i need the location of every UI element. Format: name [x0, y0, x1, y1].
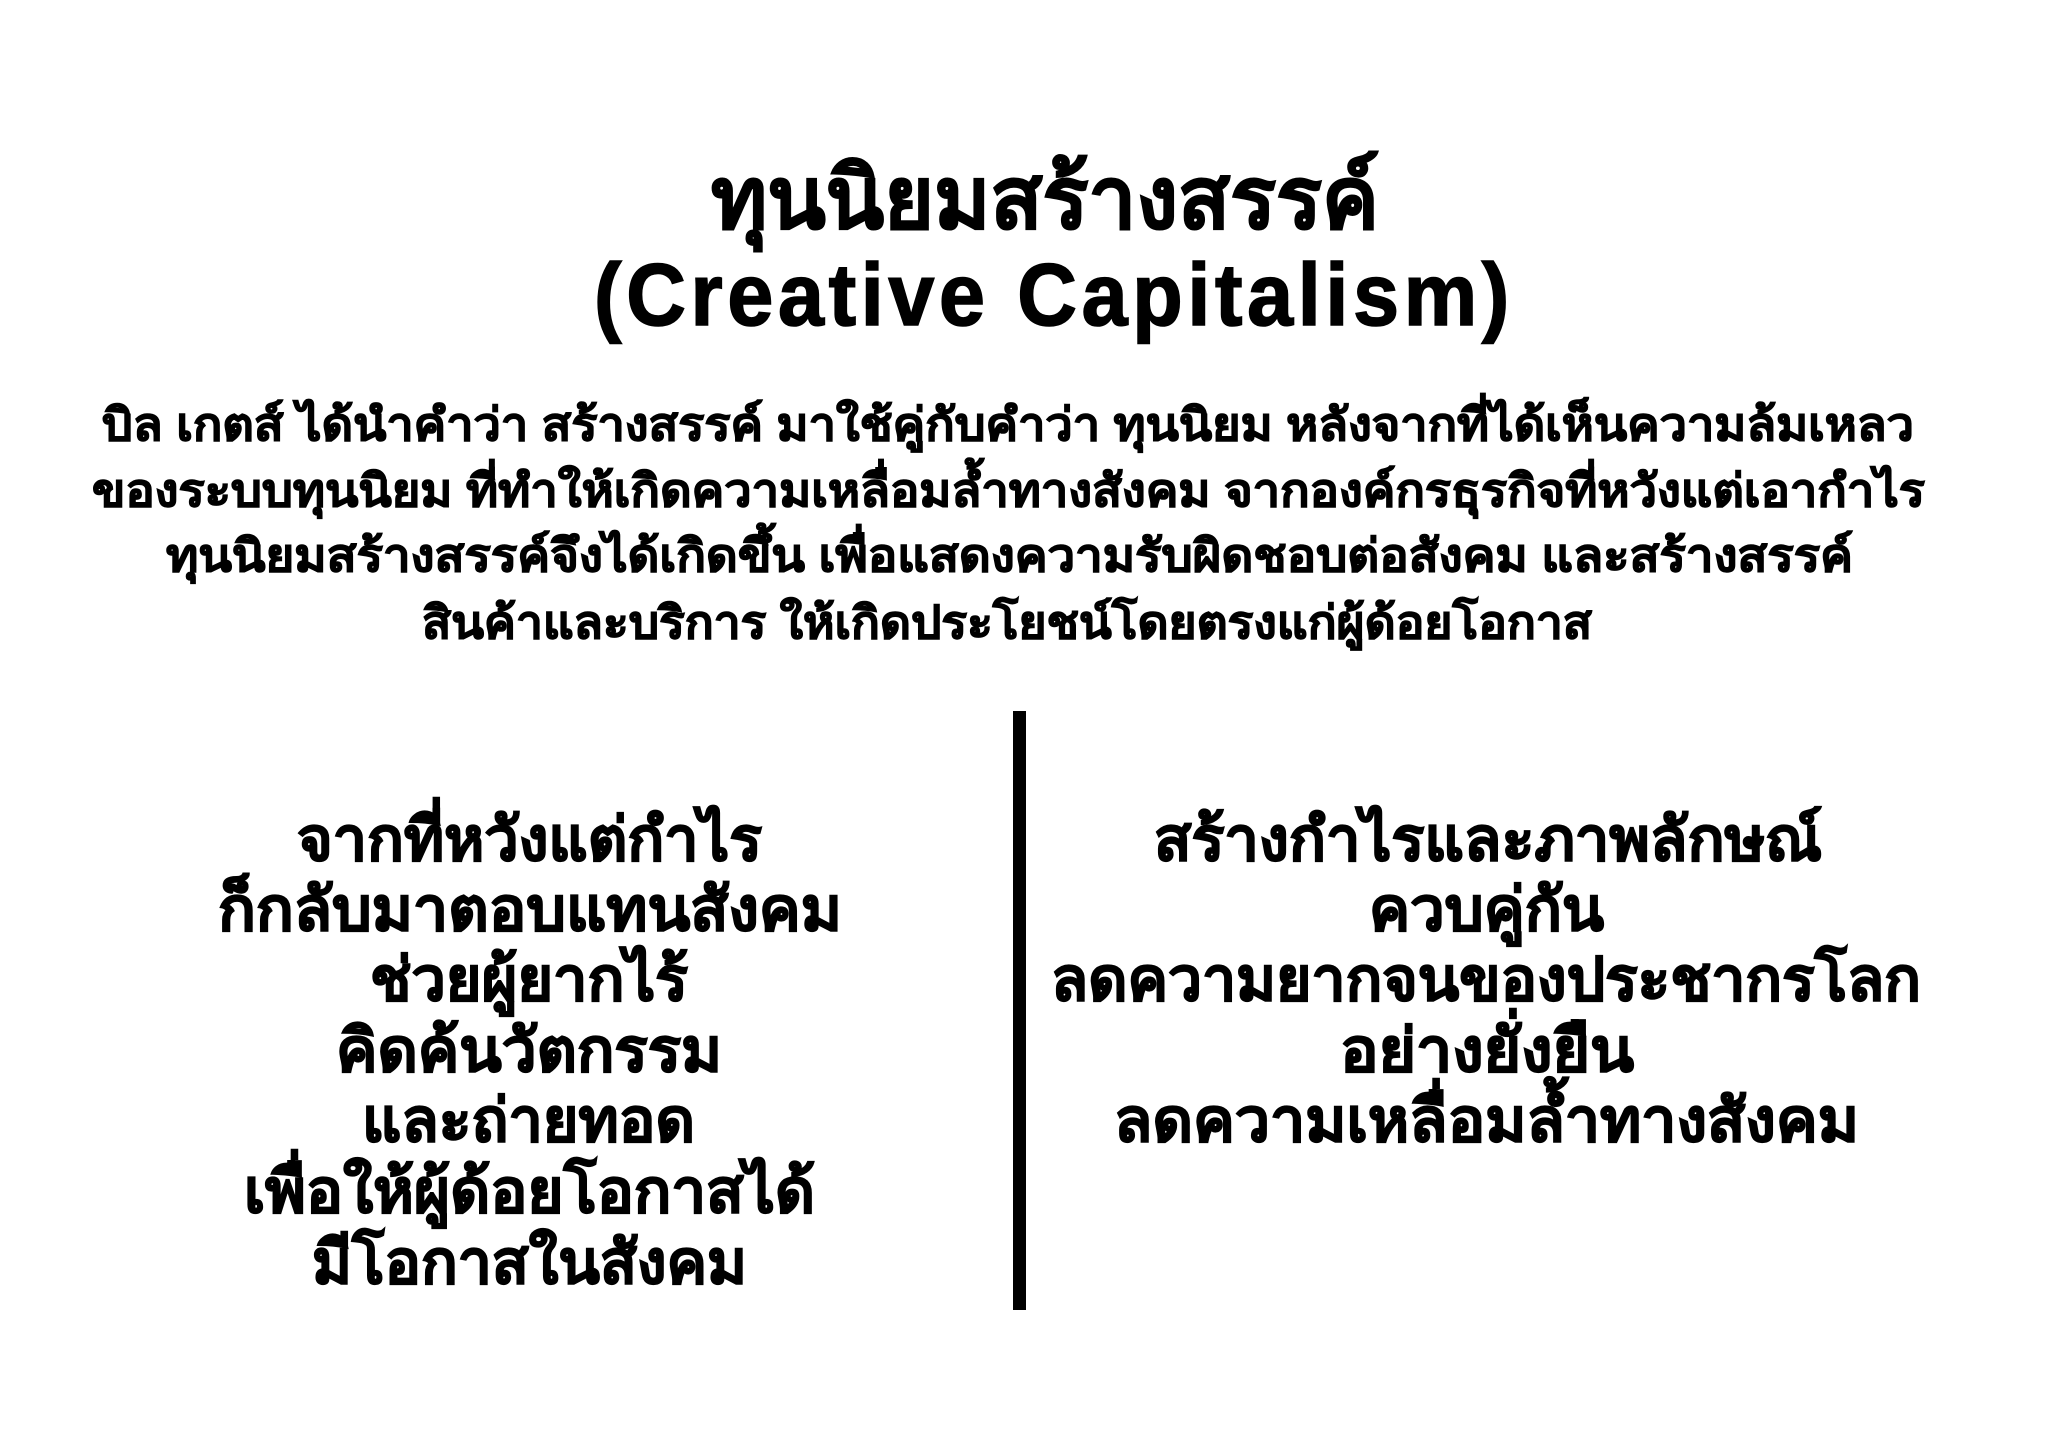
right column text: อย่างยั่งยืน — [1340, 1008, 1634, 1084]
intro paragraph: ของระบบทุนนิยม ที่ทำให้เกิดความเหลื่อมล้ำทางสังคม จากองค์กรธุรกิจที่หวังแต่เอากำไร — [92, 457, 1925, 519]
left column text: เพื่อให้ผู้ด้อยโอกาสได้ — [244, 1149, 815, 1229]
left column text: มีโอกาสในสังคม — [312, 1227, 747, 1296]
intro paragraph: สินค้าและบริการ ให้เกิดประโยชน์โดยตรงแก่ผู้ด้อยโอกาส — [422, 596, 1593, 651]
left column text: ช่วยผู้ยากไร้ — [370, 944, 688, 1017]
title: ทุนนิยมสร้างสรรค์ — [711, 151, 1379, 252]
title — [594, 151, 1514, 344]
right column text — [1051, 804, 1921, 1154]
left column text: คิดค้นวัตกรรม — [336, 1017, 722, 1084]
left column text — [218, 797, 842, 1296]
title: (Creative Capitalism) — [594, 245, 1514, 344]
intro paragraph: บิล เกตส์ ได้นำคำว่า สร้างสรรค์ มาใช้คู่กับคำว่า ทุนนิยม หลังจากที่ได้เห็นความล้มเหลว — [102, 393, 1914, 453]
left column text: ก็กลับมาตอบแทนสังคม — [218, 873, 842, 943]
vertical divider — [1013, 711, 1026, 1310]
intro paragraph: ทุนนิยมสร้างสรรค์จึงได้เกิดขึ้น เพื่อแสดงความรับผิดชอบต่อสังคม และสร้างสรรค์ — [166, 522, 1853, 584]
right column text: ควบคู่กัน — [1369, 876, 1604, 947]
right column text: สร้างกำไรและภาพลักษณ์ — [1154, 804, 1822, 873]
right column text: ลดความยากจนของประชากรโลก — [1051, 944, 1921, 1013]
right column text: ลดความเหลื่อมล้ำทางสังคม — [1114, 1076, 1859, 1154]
left column text: และถ่ายทอด — [362, 1087, 695, 1154]
left column text: จากที่หวังแต่กำไร — [297, 797, 762, 873]
intro paragraph — [92, 393, 1925, 651]
